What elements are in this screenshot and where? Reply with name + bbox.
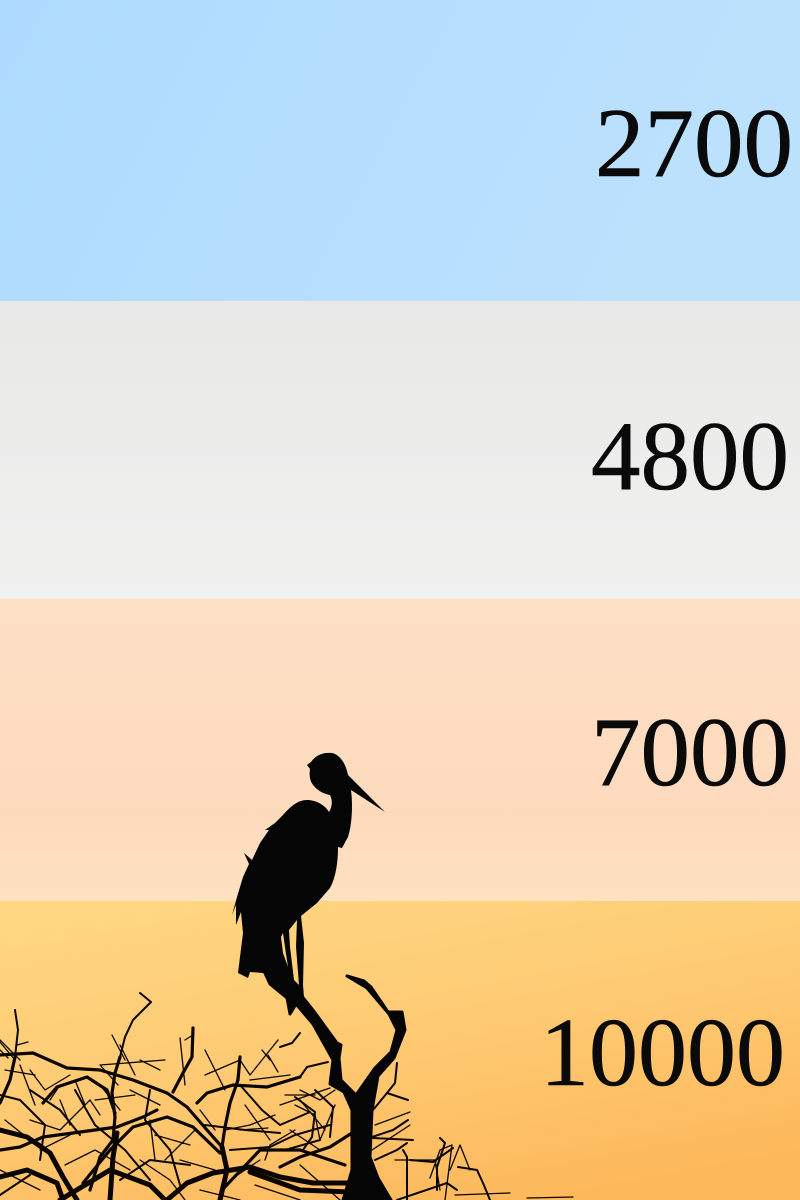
heron silhouette	[232, 753, 385, 997]
label: 4800: 4800	[591, 402, 789, 511]
band: 4800 grey	[0, 301, 800, 599]
band: 2700 blue	[0, 0, 800, 301]
label: 10000: 10000	[540, 999, 785, 1107]
tree branches	[0, 993, 573, 1200]
band: 10000 orange	[0, 901, 800, 1200]
band: 7000 peach	[0, 599, 800, 901]
label: 2700: 2700	[595, 89, 793, 198]
label: 7000: 7000	[591, 698, 789, 807]
tree trunk and main limbs	[264, 971, 405, 1200]
